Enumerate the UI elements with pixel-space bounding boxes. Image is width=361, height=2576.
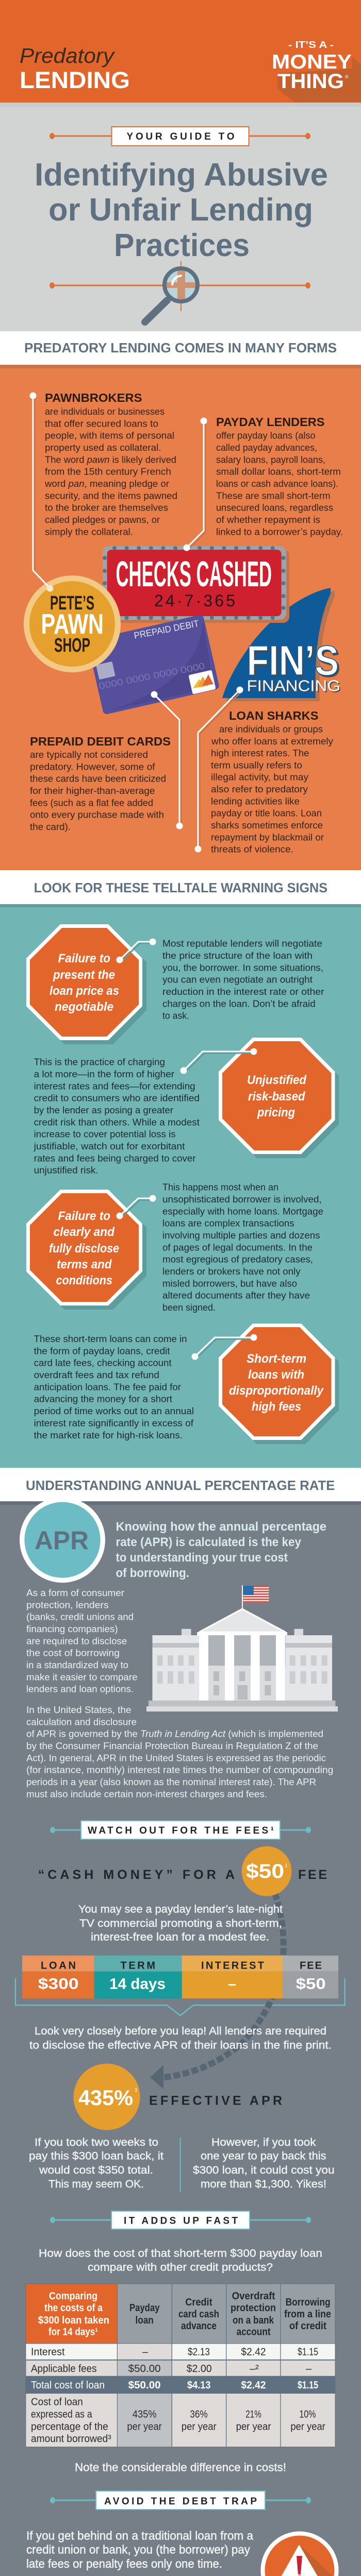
text: truth in lending act: of APR is governed by the Truth in Lending Act (which is implemented (26, 1728, 323, 1739)
panel: prepaid debit cards text: for their higher-than-average (30, 785, 155, 796)
text: consumer protection: the cost of borrowing (26, 1648, 120, 1658)
text: payday commercial: You may see a payday lender’s late-night (78, 1904, 283, 1916)
panel: prepaid debit cards text: the card). (30, 821, 71, 832)
icon: loan shark fin with Fin's Financing: FIN’S (247, 637, 339, 684)
table: comparing credit products: Credit (185, 2297, 212, 2308)
label: avoid the debt trap (50, 2491, 311, 2510)
connector: sign 4 (192, 1334, 257, 1360)
panel: pawnbrokers text (44, 391, 177, 537)
table: comparing credit products: percentage of the (31, 2421, 108, 2433)
table: loan term interest fee: INTEREST (201, 1960, 264, 1972)
label: avoid the debt trap: AVOID THE DEBT TRAP (104, 2496, 257, 2507)
connector: prepaid card (151, 691, 183, 829)
panel: payday lenders text: salary loans, payroll loans, (216, 454, 325, 465)
callout: 435% effective APR: 435% (78, 2086, 133, 2110)
panel: loan sharks text: threats of violence. (211, 844, 293, 855)
header title: Predatory Lending (20, 44, 130, 93)
text: risk-based pricing: a lot more—in the form of higher (34, 1069, 174, 1079)
panel: pawnbrokers text: simply the collateral. (45, 526, 133, 537)
table: comparing credit products: per year (236, 2421, 271, 2433)
text: truth in lending act: calculation and disclosure (26, 1716, 137, 1727)
panel: payday lenders text: offer payday loans (also (216, 430, 316, 441)
main title (35, 157, 328, 263)
text: look very closely (29, 2025, 332, 2052)
icon: Pete's Pawn Shop badge: SHOP (54, 635, 90, 656)
text: debt trap explanation: late fees or penalty fees only one time. (26, 2557, 222, 2570)
table: comparing credit products: per year (127, 2421, 162, 2433)
main title: or Unfair Lending (48, 192, 313, 228)
text: one year: one year to pay back this (201, 2150, 326, 2162)
label: watch out for the fees: WATCH OUT FOR THE FEES¹ (88, 1825, 274, 1836)
panel: loan sharks text: term usually refers to (211, 759, 302, 770)
text: disclosure: loans are complex transactions (162, 1218, 294, 1229)
logo: It's a Money Thing: - IT’S A - (288, 40, 334, 50)
logo: It's a Money Thing: MONEY (272, 51, 352, 73)
text: risk-based pricing: interest rates and fees—for extending (34, 1080, 195, 1091)
panel: prepaid debit cards text: are typically not considered (30, 749, 148, 760)
panel: pawnbrokers text: that offer secured loans to (45, 418, 158, 429)
header title: Predatory Lending: LENDING (20, 67, 130, 93)
table: comparing credit products: for 14 days¹ (48, 2327, 98, 2338)
text: two weeks (29, 2137, 163, 2190)
text: short-term loans: card late fees, checking account (34, 1358, 172, 1368)
connector: payday lenders to sign (184, 417, 207, 551)
text: one year: However, if you took (211, 2137, 316, 2148)
logo: It's a Money Thing (272, 40, 361, 103)
connector: pawnbrokers to badge (30, 393, 54, 591)
text: debt trap explanation: If you get behind on a traditional loan from a (26, 2529, 253, 2542)
panel: pawnbrokers text: people, with items of personal (45, 430, 174, 441)
panel: pawnbrokers text: are individuals or businesses (45, 406, 165, 417)
table: comparing credit products: $4.13 (187, 2380, 210, 2391)
panel: prepaid debit cards text (30, 735, 171, 832)
text: risk-based pricing: justifiable, watch out for exorbitant (34, 1141, 185, 1151)
table: loan term interest fee: – (228, 1976, 236, 1993)
table: comparing credit products: $2.42 (241, 2347, 266, 2358)
text: one year: $300 loan, it could cost you (193, 2164, 335, 2176)
table: loan term interest fee: 14 days (109, 1976, 166, 1993)
text: risk-based pricing: increase to cover potential loss is (34, 1129, 176, 1140)
panel: loan sharks text: repayment by blackmail or (211, 832, 324, 842)
text: payday commercial: interest-free loan for a modest fee. (91, 1931, 269, 1943)
stop sign: failure to present: negotiable (55, 1000, 113, 1014)
text: truth in lending act: periods in a year (also known as the nominal interest rate). The APR (26, 1776, 316, 1787)
icon: Pete's Pawn Shop badge: PETE’S (50, 592, 94, 614)
panel: prepaid debit cards text: onto every purchase made with (30, 809, 164, 820)
panel: payday lenders text: of whether repayment is (216, 514, 320, 525)
icon: prepaid debit card: 0000 0000 0000 0000 (98, 660, 206, 691)
table: comparing credit products: Payday (129, 2302, 160, 2314)
text: negotiable loan price (162, 938, 324, 1021)
stop sign: failure to disclose (26, 1190, 146, 1310)
panel: payday lenders text: linked to a borrower’s payday. (216, 526, 343, 537)
panel: payday lenders text: small dollar loans, short-term (216, 466, 341, 477)
stop sign: failure to present (26, 924, 146, 1044)
table: comparing credit products: Applicable fees (31, 2363, 97, 2375)
text: risk-based pricing: rates and fees being charged to cover (34, 1153, 195, 1163)
text: consumer protection: make it easier to compare (26, 1671, 137, 1682)
panel: payday lenders text: PAYDAY LENDERS (216, 415, 325, 429)
text: disclosure: misled borrowers, but have also (162, 1278, 297, 1289)
panel: loan sharks text: illegal activity, but may (211, 772, 309, 783)
table: comparing credit products: $1.15 (298, 2380, 318, 2391)
panel: prepaid debit cards text: these cards have been criticized (30, 773, 166, 784)
icon: government building with flag (146, 1585, 338, 1711)
panel: pawnbrokers text: to the broker are themselves (45, 502, 168, 513)
text: disclosure: This happens most when an (162, 1182, 278, 1193)
text: look very closely: Look very closely before you leap! All lenders are required (35, 2025, 326, 2037)
panel: loan sharks text: payday or title loans. Loan (211, 808, 322, 819)
table: comparing credit products: protection (231, 2302, 276, 2314)
text: short-term loans: interest rate significantly in excess of (34, 1417, 194, 1428)
text: APR intro: to understanding your true cost (116, 1551, 288, 1565)
table: comparing credit products: Comparing (49, 2291, 97, 2302)
table: comparing credit products: $1.15 (298, 2347, 318, 2358)
stop sign: failure to present: Failure to (58, 952, 110, 965)
stop sign: failure to present: present the (53, 968, 115, 982)
text: disclosure: been signed. (162, 1302, 216, 1313)
table: comparing credit products: amount borrowed³ (31, 2433, 111, 2445)
text: APR intro: of borrowing. (116, 1566, 189, 1580)
panel: payday lenders text: called payday advances, (216, 442, 317, 453)
section heading: predatory lending forms: PREDATORY LENDING COMES IN MANY FORMS (24, 340, 337, 355)
text: risk-based pricing: by the lender as posing a greater (34, 1105, 173, 1115)
text: one year (193, 2137, 335, 2190)
text: negotiable loan price: to ask. (162, 1010, 189, 1021)
table: comparing credit products: Overdraft (232, 2291, 275, 2302)
stop sign: failure to disclose: clearly and (54, 1225, 115, 1239)
panel: loan sharks text: LOAN SHARKS (229, 709, 319, 722)
text: short-term loans (34, 1333, 194, 1440)
stop sign: unjustified risk-based pricing: Unjustified (247, 1073, 307, 1087)
text: negotiable loan price: charges on the loan. Don’t be afraid (162, 998, 316, 1009)
divider between paragraphs (180, 2138, 181, 2192)
text: consumer protection: in a standardized way to (26, 1659, 128, 1670)
header title: Predatory Lending: Predatory (20, 44, 116, 67)
table: comparing credit products (25, 2283, 335, 2447)
text: short-term loans: advancing the money for a short (34, 1394, 172, 1404)
main title: Practices (114, 228, 250, 263)
text: truth in lending act: must also include certain non-interest charges and fees. (26, 1788, 267, 1799)
icon: loan shark fin with Fin's Financing (222, 588, 340, 701)
connector: sign 3 (117, 1195, 156, 1219)
panel: payday lenders text: These are small short-term (216, 490, 331, 501)
table: loan term interest fee: $300 (38, 1976, 79, 1993)
text: consumer protection: As a form of consumer (26, 1587, 124, 1598)
table: comparing credit products: $50.00 (128, 2380, 161, 2391)
text: truth in lending act (26, 1704, 333, 1799)
heading: cash money for a $50 fee: FEE (298, 1868, 327, 1882)
panel: prepaid debit cards text: fees (such as a flat fee added (30, 797, 153, 808)
heading: cash money for a $50 fee: 1 (285, 1863, 288, 1869)
table: comparing credit products: per year (290, 2421, 325, 2433)
text: risk-based pricing: credit risk than others. While a modest (34, 1116, 200, 1127)
stop sign: short-term loans: high fees (252, 1400, 301, 1414)
stop sign: unjustified risk-based pricing (219, 1038, 339, 1158)
text: truth in lending act: In the United States, the (26, 1704, 131, 1715)
callout: 435% effective APR (73, 2064, 282, 2130)
text: consumer protection: protection, lenders (26, 1599, 109, 1610)
panel: loan sharks text: also refer to predatory (211, 784, 308, 794)
table: comparing credit products: on a bank (233, 2315, 274, 2326)
text: short-term loans: These short-term loans can come in (34, 1333, 187, 1344)
text: two weeks: pay this $300 loan back, it (29, 2150, 163, 2162)
icon: checks cashed sign: 24·7·365 (154, 591, 235, 610)
connector: sign 1 (117, 939, 156, 963)
panel: pawnbrokers text: PAWNBROKERS (45, 391, 142, 404)
label: your guide to (50, 127, 310, 146)
text: risk-based pricing: This is the practice of charging (34, 1057, 165, 1067)
text: disclosure (162, 1182, 323, 1313)
panel: pawnbrokers text: called pledges or pawns, or (45, 514, 160, 525)
panel: prepaid debit cards text: PREPAID DEBIT CARDS (30, 735, 171, 748)
text: negotiable loan price: you, the borrower. In some situations, (162, 962, 323, 973)
text: disclosure: altered documents after they have (162, 1290, 310, 1301)
table: comparing credit products: $2.13 (188, 2347, 210, 2358)
text: negotiable loan price: you can even negotiate an outright (162, 974, 313, 985)
table: comparing credit products: $50.00 (128, 2363, 161, 2375)
icon: prepaid debit card: PREPAID DEBIT (133, 618, 200, 641)
text: disclosure: especially with home loans. Mortgage (162, 1206, 323, 1216)
panel: loan sharks text: lending activities like (211, 795, 300, 806)
table: comparing credit products: advance (181, 2320, 217, 2332)
table: comparing credit products: account (236, 2327, 271, 2338)
text: disclosure: most egregious of predatory cases, (162, 1254, 313, 1265)
table: loan term interest fee: $50 (296, 1976, 326, 1993)
connector: sign 2 (180, 1048, 257, 1074)
text: two weeks: If you took two weeks to (35, 2137, 158, 2148)
panel: pawnbrokers text: security, and the items pawned (45, 490, 177, 501)
icon: checks cashed sign (103, 546, 289, 623)
text: short-term loans: period of time works out to an annual (34, 1405, 194, 1416)
text: short-term loans: anticipation loans. The fee paid for (34, 1381, 181, 1392)
text: consumer protection (26, 1587, 137, 1694)
panel: pawnbrokers text: word pan, meaning pledge or (44, 478, 169, 489)
text: APR intro (116, 1520, 326, 1580)
text: negotiable loan price: reduction in the interest rate or other (162, 986, 324, 997)
table: comparing credit products: per year (182, 2421, 217, 2433)
label: it adds up fast (50, 2211, 311, 2229)
text: truth in lending act: by the Consumer Financial Protection Bureau in Regulation Z of the (26, 1740, 318, 1751)
table: comparing credit products: 36% (190, 2409, 208, 2420)
text: disclosure: of pages of legal documents. In the (162, 1242, 313, 1252)
text: APR intro: Knowing how the annual percentage (116, 1520, 326, 1534)
panel: payday lenders text: loans or cash advance loans). (216, 478, 338, 489)
table: comparing credit products: – (142, 2347, 149, 2358)
text: short-term loans: the form of payday loans, credit (34, 1345, 170, 1356)
text: payday commercial (78, 1904, 283, 1943)
main title: Identifying Abusive (35, 157, 328, 193)
text: risk-based pricing (34, 1057, 200, 1176)
text: disclosure: lenders or brokers have not only (162, 1266, 301, 1277)
table: comparing credit products: Interest (31, 2347, 65, 2358)
icon: magnifying glass over crossed lines (50, 261, 310, 322)
text: short-term loans: the market rate for high-risk loans. (34, 1430, 183, 1440)
icon: APR badge: APR (35, 1526, 89, 1555)
stop sign: failure to present: loan price as (50, 984, 119, 998)
bracket below loan table (15, 1978, 345, 2015)
icon: Pete's Pawn Shop badge: PAWN (41, 608, 104, 640)
panel: payday lenders text (216, 415, 343, 537)
panel: pawnbrokers text: property used as collateral. (45, 442, 161, 453)
table: comparing credit products: the costs of a (44, 2302, 103, 2314)
table: loan term interest fee (22, 1956, 338, 1998)
text: disclosure: unsophisticated borrower is involved, (162, 1194, 322, 1205)
text: consumer protection: (banks, credit unions and (26, 1612, 134, 1622)
stop sign: unjustified risk-based pricing: pricing (257, 1106, 295, 1120)
text: truth in lending act: Act). In general, APR in the United States is expressed as the periodic (26, 1752, 326, 1763)
table: comparing credit products: loan (135, 2315, 154, 2326)
text: negotiable loan price: Most reputable lenders will negotiate (162, 938, 322, 949)
stop sign: failure to disclose: conditions (56, 1274, 112, 1287)
callout: 435% effective APR: 3 (135, 2088, 137, 2093)
text: consumer protection: are required to disclose (26, 1635, 127, 1646)
table: loan term interest fee: LOAN (41, 1960, 76, 1972)
stop sign: failure to disclose: Failure to (58, 1209, 110, 1223)
table: comparing credit products: – (306, 2363, 312, 2375)
stop sign: short-term loans: loans with (248, 1368, 304, 1382)
panel: payday lenders text: unsecured loans, regardless (216, 502, 333, 513)
table: loan term interest fee: FEE (300, 1960, 322, 1972)
text: short-term loans: overdraft fees and tax refund (34, 1369, 159, 1380)
text: comparison question: compare with other credit products? (88, 2262, 273, 2274)
icon: warning triangle (260, 2531, 339, 2576)
panel: loan sharks text: are individuals or groups (219, 724, 323, 735)
table: comparing credit products: Borrowing (286, 2297, 331, 2308)
table: comparing credit products: card cash (178, 2309, 219, 2320)
icon: APR badge (20, 1497, 105, 1583)
heading: cash money for a $50 fee: $50 (246, 1860, 284, 1883)
section heading: understanding APR: UNDERSTANDING ANNUAL PERCENTAGE RATE (26, 1478, 335, 1493)
table: comparing credit products: 10% (299, 2409, 316, 2420)
table: comparing credit products: Total cost of loan (31, 2380, 105, 2391)
stop sign: short-term loans: disproportionally (229, 1384, 324, 1398)
panel: loan sharks text: sharks sometimes enforce (211, 820, 323, 831)
panel: pawnbrokers text: from the 15th century French (45, 466, 171, 477)
arrow: dashed from fee to effective APR (150, 1893, 284, 2089)
logo: It's a Money Thing: THING (277, 70, 344, 93)
table: loan term interest fee: TERM (121, 1960, 155, 1972)
text: payday commercial: TV commercial promoting a short-term, (79, 1918, 282, 1929)
stop sign: failure to disclose: terms and (57, 1258, 112, 1272)
text: two weeks: would cost $350 total. (39, 2164, 153, 2176)
label: it adds up fast: IT ADDS UP FAST (124, 2216, 238, 2227)
panel: loan sharks text (211, 709, 334, 855)
stop sign: failure to disclose: fully disclose (49, 1242, 119, 1256)
panel: prepaid debit cards text: predatory. However, some of (30, 761, 155, 772)
table: comparing credit products: –² (250, 2363, 259, 2375)
text: truth in lending act: (for instance, monthly) interest rate times the number of compounding (26, 1765, 333, 1775)
stop sign: unjustified risk-based pricing: risk-based (248, 1090, 306, 1104)
text: debt trap explanation: credit union or bank, you (the borrower) pay (26, 2543, 250, 2556)
text: disclosure: involving multiple parties and dozens (162, 1230, 320, 1241)
text: debt trap explanation (26, 2529, 323, 2576)
section heading: warning signs: LOOK FOR THESE TELLTALE WARNING SIGNS (34, 880, 327, 895)
connector: loan sharks (195, 686, 243, 852)
table: comparing credit products: $300 loan taken (38, 2315, 109, 2326)
text: negotiable loan price: the price structure of the loan with (162, 950, 313, 961)
label: watch out for the fees (50, 1821, 311, 1839)
text: two weeks: This may seem OK. (48, 2178, 144, 2190)
panel: pawnbrokers text: The word pawn is likely derived (45, 454, 176, 465)
panel: loan sharks text: who offer loans at extremely (211, 736, 334, 747)
text: APR intro: rate (APR) is calculated is the key (116, 1535, 302, 1549)
text: consumer protection: lenders and loan options. (26, 1684, 134, 1694)
text: comparison question: How does the cost of that short-term $300 payday loan (39, 2248, 322, 2260)
callout: 435% effective APR: EFFECTIVE APR (149, 2094, 282, 2108)
text: consumer protection: financing companies) (26, 1623, 118, 1634)
heading: cash money for a $50 fee (38, 1846, 327, 1896)
label: your guide to: YOUR GUIDE TO (127, 131, 234, 142)
text: risk-based pricing: unjustified risk. (34, 1165, 99, 1176)
table: comparing credit products: expressed as a (31, 2409, 92, 2420)
text: note the difference: Note the considerable difference in costs! (75, 2461, 286, 2474)
stop sign: short-term loans (219, 1324, 339, 1444)
icon: loan shark fin with Fin's Financing: FINANCING (247, 677, 340, 695)
text: look very closely: to disclose the effective APR of their loans in the fine print. (29, 2040, 332, 2052)
text: risk-based pricing: credit to consumers who are identified (34, 1093, 200, 1104)
icon: prepaid debit card (87, 614, 220, 715)
text: one year: more than $1,300. Yikes! (201, 2178, 326, 2190)
logo: It's a Money Thing: ® (345, 74, 349, 79)
icon: Pete's Pawn Shop badge (24, 575, 121, 672)
table: comparing credit products: $2.00 (187, 2363, 212, 2375)
table: comparing credit products: $2.42 (241, 2380, 266, 2391)
text: comparison question (39, 2248, 322, 2274)
table: comparing credit products: of credit (289, 2320, 326, 2332)
heading: cash money for a $50 fee: “CASH MONEY” FOR A (38, 1868, 235, 1882)
table: comparing credit products: 435% (133, 2409, 157, 2420)
panel: loan sharks text: high interest rates. The (211, 748, 309, 758)
stop sign: short-term loans: Short-term (247, 1352, 306, 1366)
table: comparing credit products: 21% (245, 2409, 261, 2420)
table: comparing credit products: Cost of loan (31, 2396, 83, 2408)
table: comparing credit products: from a line (284, 2309, 331, 2320)
